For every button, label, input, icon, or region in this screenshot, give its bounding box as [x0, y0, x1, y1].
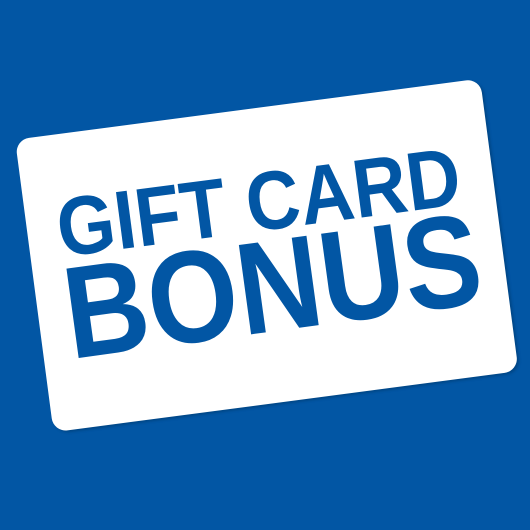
heading: gift card bonus	[51, 130, 490, 387]
heading line: bonus: BONUS	[55, 184, 490, 387]
gift card	[15, 79, 519, 432]
card shadow	[17, 80, 521, 434]
heading line: gift card: GIFT CARD	[51, 130, 466, 275]
